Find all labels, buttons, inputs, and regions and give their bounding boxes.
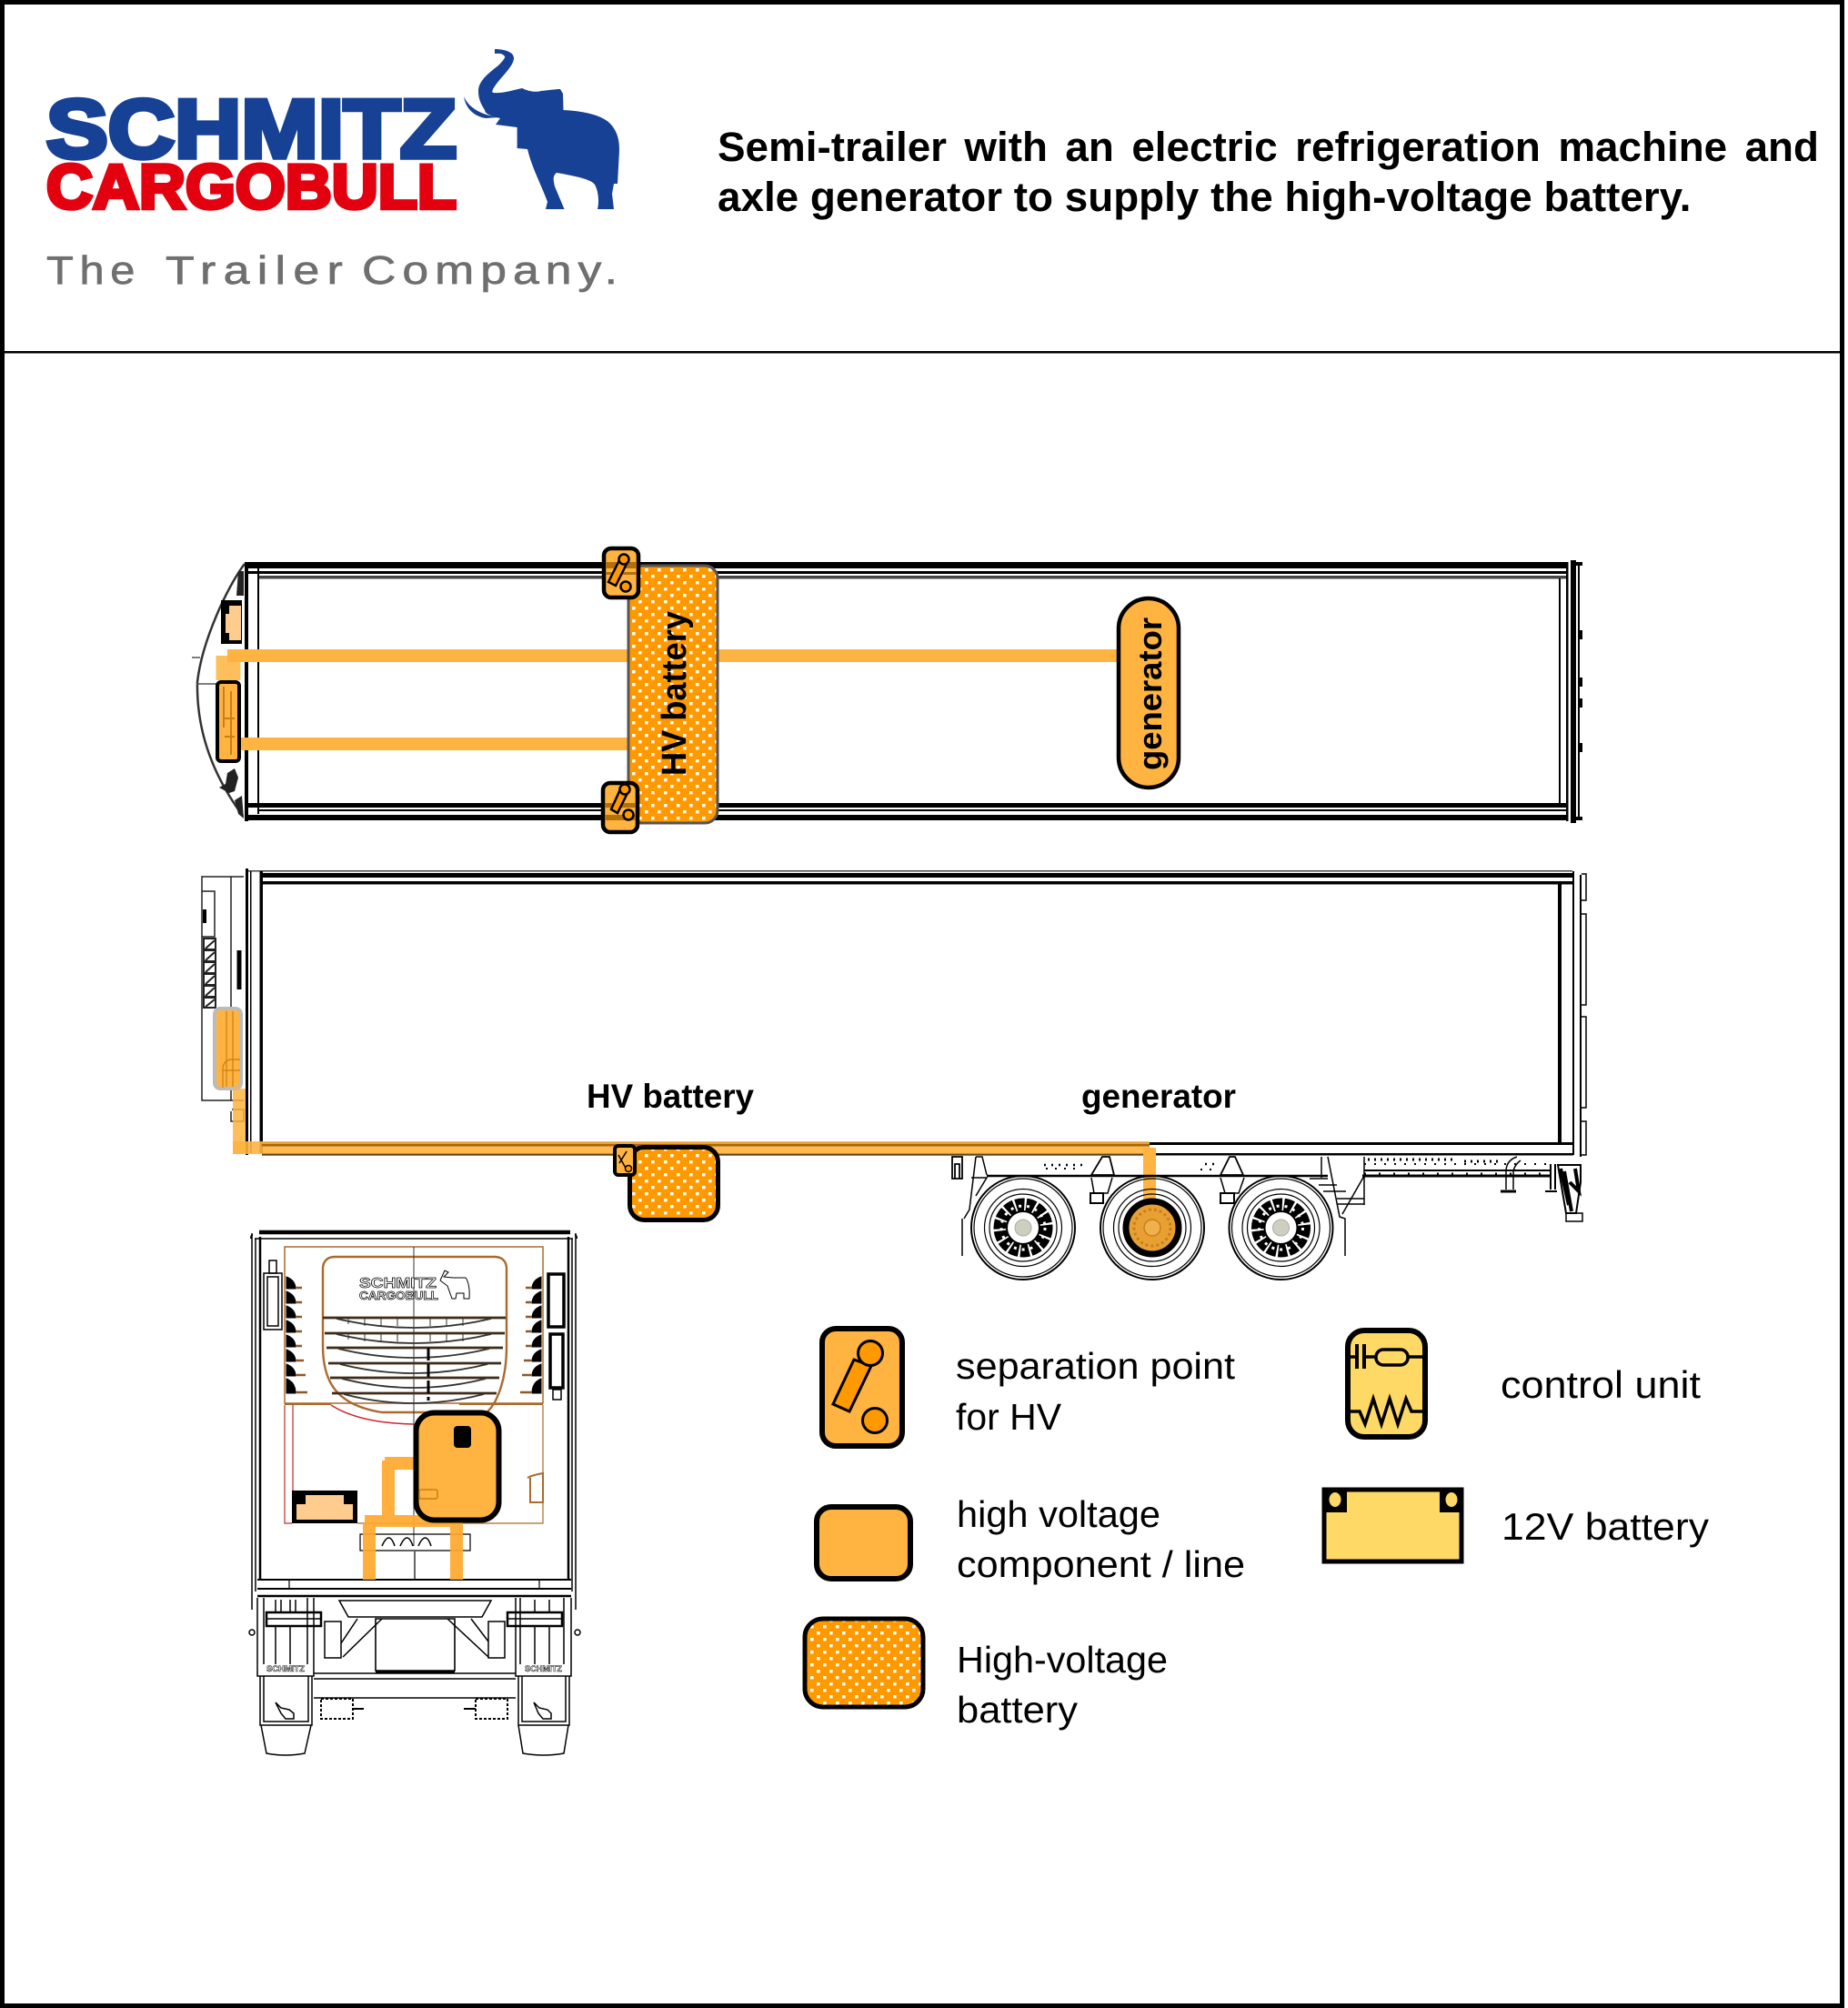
generator, plan view [1119,598,1179,788]
mudguard plates with brand text: SCHMITZ [525,1664,563,1673]
logo tagline: Company. [362,248,624,293]
title: axle generator to supply the high-voltage battery. [718,174,1691,220]
label: generator: generator [1081,1078,1236,1115]
rear logo on unit [359,1270,469,1302]
rear chassis and mudguards [249,1598,580,1755]
legend icon: high voltage component [817,1507,910,1579]
legend text: high voltage component / line [957,1493,1245,1585]
refrigeration unit panel [285,1247,543,1546]
rear view of trailer [249,1232,580,1755]
12V battery, rear view [292,1491,357,1523]
high-voltage line, side view [233,1089,1156,1200]
control unit, plan view [217,682,239,761]
title: Semi-trailer with an electric refrigeration machine and [718,124,1819,170]
legend icon: high-voltage battery [805,1619,923,1707]
legend text: separation point for HV: for HV [956,1396,1062,1438]
HV component, rear view [417,1413,498,1521]
legend text: 12V battery: 12V battery [1502,1505,1709,1548]
mudguard plates with brand text: SCHMITZ [266,1664,306,1673]
wheel 1 [971,1176,1075,1280]
refrigeration unit, side view [202,877,244,1121]
side labels [587,1078,1236,1115]
separation point, side view [615,1146,635,1175]
generator label: generator [1131,617,1169,770]
trailer outline, plan view [245,560,1582,823]
separation point, bottom side [603,783,638,832]
HV battery, plan view [628,566,718,823]
legend [805,1329,1709,1731]
legend icon: separation point [822,1329,902,1446]
logo tagline: Trailer [166,248,350,293]
HV battery label: HV battery [656,611,694,776]
rear elephant outline [440,1270,469,1299]
HV battery, side view [629,1148,718,1220]
logo wordmark SCHMITZ: SCHMITZ [46,84,457,176]
rear logo text SCHMITZ: SCHMITZ [359,1276,437,1291]
logo tagline: The [46,248,141,293]
rear body outline [251,1232,577,1610]
icon: elephant [464,49,619,209]
legend text: High-voltage battery: battery [957,1689,1079,1731]
wheel 3 [1230,1176,1333,1280]
air vents, both sides [286,1277,541,1393]
logo tagline [46,248,624,293]
legend icon: 12V battery [1323,1489,1463,1561]
side view of trailer [202,868,1586,1280]
wheel 2 with generator [1100,1176,1204,1280]
high-voltage lines, plan view [216,649,1119,750]
separation point, top side [604,548,638,597]
trailer box, side view [246,868,1586,1157]
title [718,124,1819,220]
legend text: separation point for HV [956,1345,1236,1438]
rear number plate holder [360,1534,470,1580]
logo wordmark CARGOBULL: CARGOBULL [46,152,457,222]
control port on HV component [454,1426,471,1448]
legend text: separation point for HV: separation point [956,1345,1236,1387]
rear logo text CARGOBULL: CARGOBULL [359,1289,438,1302]
legend text: High-voltage battery: High-voltage [957,1639,1168,1681]
12V battery, plan view [221,600,242,644]
logo: Schmitz Cargobull [46,49,624,293]
control unit box, side view [215,1009,241,1089]
top view of trailer [192,548,1582,832]
legend text: High-voltage battery [957,1639,1168,1731]
label: HV battery: HV battery [587,1078,754,1115]
legend text: high voltage component / line: component / line [957,1543,1245,1585]
chassis and running gear [952,1157,1582,1256]
label plate on HV component [419,1490,437,1499]
legend icon: control unit [1347,1330,1425,1437]
side fittings [264,1260,564,1502]
refrigeration unit, plan view [192,564,245,818]
legend text: control unit: control unit [1501,1363,1701,1406]
mudguard plates with brand text [266,1664,563,1673]
legend text: high voltage component / line: high voltage [957,1493,1160,1535]
high-voltage lines, rear view [363,1457,463,1580]
